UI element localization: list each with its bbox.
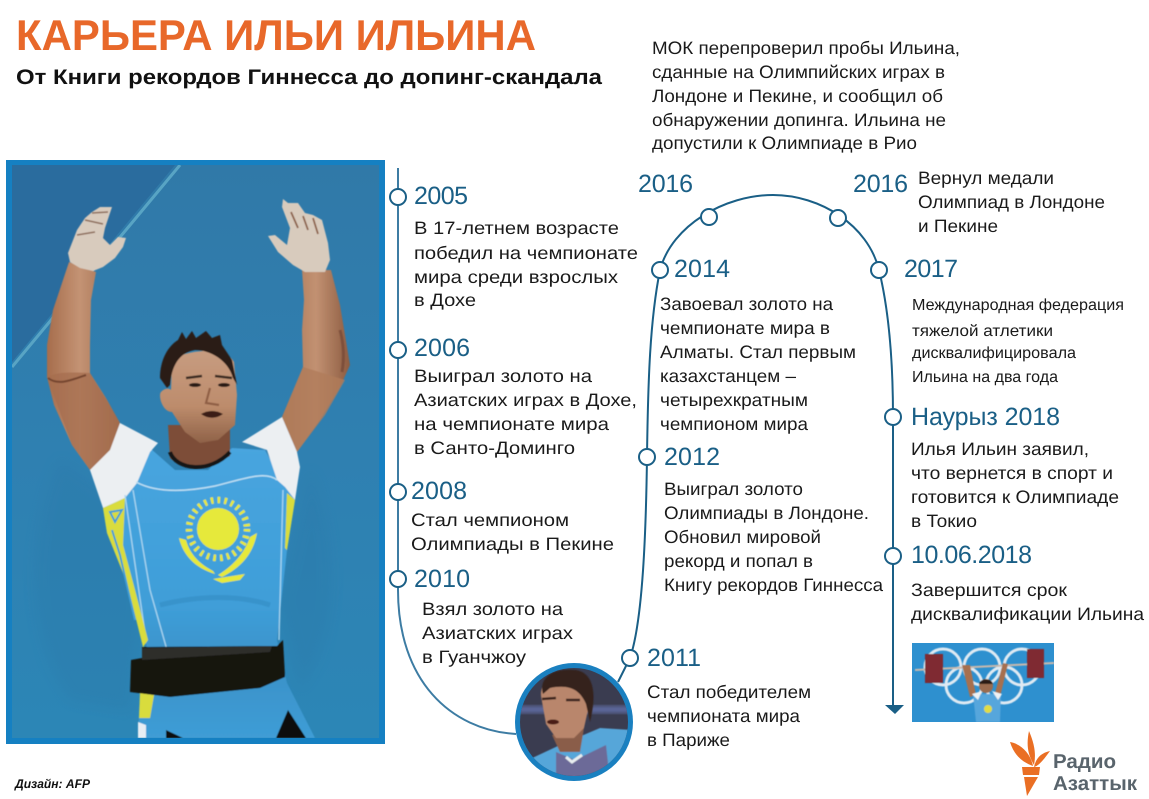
entry 2014 (660, 255, 856, 434)
entry 10.06.2018: Завершится срок (911, 580, 1067, 600)
entry 2010: Азиатских играх (422, 623, 573, 643)
timeline nodes (390, 189, 901, 666)
entry 10.06.2018: дисквалификации Ильина (911, 604, 1145, 624)
subtitle: От Книги рекордов Гиннесса до допинг-скандала (16, 66, 602, 89)
entry Nauryz 2018: Илья Ильин заявил, (911, 439, 1089, 459)
logo: Radio Azattyk (1010, 731, 1138, 796)
entry 2008: 2008 (411, 477, 467, 505)
entry 2012: 2012 (664, 443, 720, 471)
logo: Radio Azattyk: Азаттык (1053, 773, 1138, 795)
hair (160, 331, 237, 388)
intro note: IOC retest (652, 38, 960, 153)
entry 2014: 2014 (674, 255, 730, 283)
intro note: IOC retest: допустили к Олимпиаде в Рио (652, 133, 917, 153)
entry 2005 (414, 182, 638, 310)
state emblem: sun and eagle (179, 500, 257, 583)
right hand (268, 199, 330, 272)
entry 2010: 2010 (414, 565, 470, 593)
entry 2010 (414, 565, 573, 667)
entry 2017: Международная федерация (912, 297, 1124, 314)
entry 2011: Стал победителем (647, 682, 811, 702)
entry Nauryz 2018: в Токио (911, 511, 977, 531)
entry 2014: чемпионом мира (660, 414, 809, 434)
entry Nauryz 2018 (911, 403, 1119, 531)
entry 2005: 2005 (414, 182, 468, 210)
entry Nauryz 2018: готовится к Олимпиаде (911, 487, 1119, 507)
entry 2006 (414, 334, 637, 458)
intro note: IOC retest: обнаружении допинга. Ильина не (652, 110, 946, 130)
entry 2012: Выиграл золото (664, 479, 803, 499)
entry 2014: Алматы. Стал первым (660, 342, 856, 362)
entry 2016 right (853, 168, 1105, 236)
entry 2012: рекорд и попал в (664, 551, 813, 571)
entry 2006: Азиатских играх в Дохе, (414, 390, 637, 410)
intro note: IOC retest: Лондоне и Пекине, и сообщил об (652, 86, 943, 106)
torso: singlet (103, 448, 315, 738)
entry 2011: 2011 (647, 644, 701, 672)
entry 2011: в Париже (647, 730, 730, 750)
shorts black (166, 710, 306, 738)
year label 2016 left: 2016 (638, 170, 693, 198)
intro note: IOC retest: сданные на Олимпийских играх в (652, 62, 945, 82)
entry 2011: чемпионата мира (647, 706, 801, 726)
belt (130, 640, 285, 697)
entry 2006: 2006 (414, 334, 470, 362)
entry 2005: победил на чемпионате (414, 243, 638, 263)
left arm (47, 262, 120, 470)
entry 2017: дисквалифицировала (912, 345, 1076, 362)
entry 2005: в Дохе (414, 290, 476, 310)
head (160, 351, 237, 443)
yellow ornament (103, 498, 148, 647)
entry 2016 right: Олимпиад в Лондоне (918, 192, 1105, 212)
entry 2005: В 17-летнем возрасте (414, 218, 619, 238)
entry 2012: Олимпиады в Лондоне. (664, 503, 869, 523)
entry 2014: казахстанцем – (660, 366, 796, 386)
entry 2008: Олимпиады в Пекине (411, 534, 614, 554)
entry 2014: четырехкратным (660, 390, 808, 410)
entry 2017 (904, 255, 1124, 386)
main photo: weightlifter with raised arms (6, 160, 385, 744)
entry 10.06.2018 (911, 541, 1145, 624)
timeline curve (398, 168, 893, 734)
right arm (282, 270, 350, 452)
entry 2012 (664, 443, 884, 595)
entry 2012: Книгу рекордов Гиннесса (664, 575, 884, 595)
entry Nauryz 2018: что вернется в спорт и (911, 463, 1113, 483)
design credit: Дизайн: AFP (14, 777, 91, 791)
entry 2011 (647, 644, 811, 750)
entry 2006: Выиграл золото на (414, 366, 593, 386)
entry 2008 (411, 477, 614, 554)
entry 2010: Взял золото на (422, 599, 564, 619)
entry 2014: чемпионате мира в (660, 318, 830, 338)
entry 2012: Обновил мировой (664, 527, 821, 547)
circular portrait (515, 663, 633, 781)
small photo: lifter with barbell and Olympic rings (912, 643, 1054, 722)
entry 2006: на чемпионате мира (414, 414, 610, 434)
logo: Radio Azattyk: Радио (1053, 751, 1116, 773)
entry 2008: Стал чемпионом (411, 510, 569, 530)
entry 2005: мира среди взрослых (414, 267, 618, 287)
intro note: IOC retest: МОК перепроверил пробы Ильина, (652, 38, 960, 58)
entry 2006: в Санто-Доминго (414, 438, 575, 458)
face features (186, 376, 232, 418)
entry 2016 right: и Пекине (918, 216, 998, 236)
entry Nauryz 2018: Наурыз 2018 (911, 403, 1060, 431)
left hand (68, 207, 126, 271)
entry 10.06.2018: 10.06.2018 (911, 541, 1032, 569)
entry 2017: тяжелой атлетики (912, 323, 1053, 340)
entry 2010: в Гуанчжоу (422, 647, 526, 667)
entry 2016 right: Вернул медали (918, 168, 1054, 188)
entry 2014: Завоевал золото на (660, 294, 834, 314)
entry 2017: 2017 (904, 255, 958, 283)
white sleeves (90, 423, 158, 508)
arrow head (885, 705, 904, 714)
entry 2017: Ильина на два года (912, 369, 1058, 386)
entry 2016 right: 2016 (853, 170, 908, 198)
title: КАРЬЕРА ИЛЬИ ИЛЬИНА (16, 12, 536, 60)
neck (168, 425, 230, 466)
